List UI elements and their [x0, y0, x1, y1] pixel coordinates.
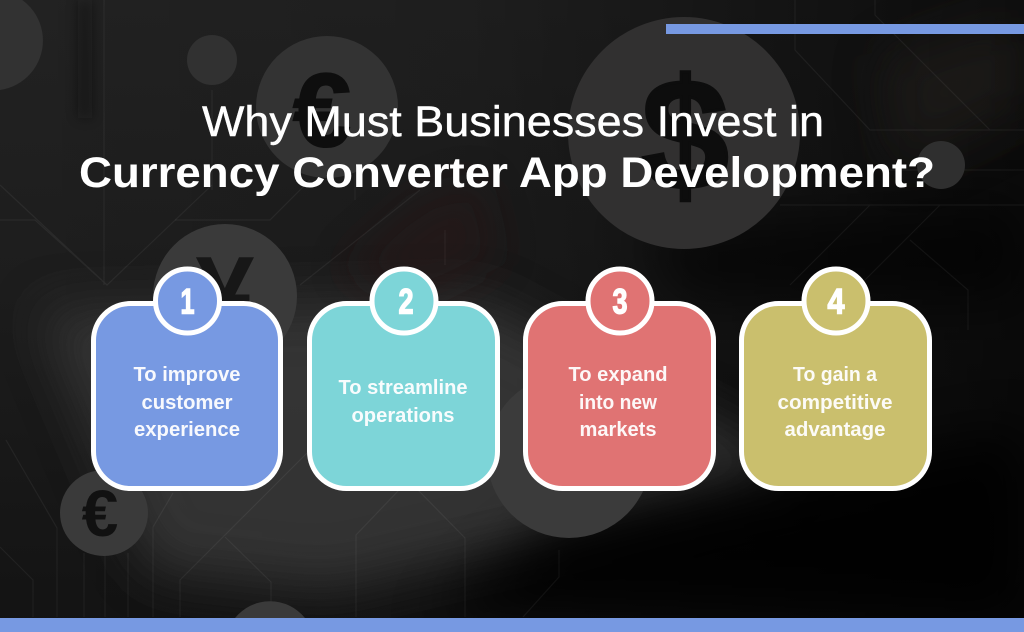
card 2 — [310, 269, 498, 488]
card 2 text — [338, 377, 468, 427]
card 2 text: operations — [352, 405, 454, 427]
currency icon: euro small — [60, 470, 148, 556]
title: Why Must Businesses Invest in — [202, 98, 824, 146]
card 1 — [94, 269, 280, 488]
currency icon: euro large — [256, 36, 398, 178]
badge 2: 2 — [398, 282, 414, 322]
card 4 — [742, 269, 930, 488]
badge 3 — [588, 269, 652, 333]
badge 3: 3 — [612, 282, 628, 322]
currency icon: yen: ¥ — [196, 235, 255, 353]
badge 1 — [156, 269, 220, 333]
currency icon: dollar large — [568, 17, 800, 249]
card 3 text: To expand — [568, 364, 668, 386]
currency icon: bottom dot — [235, 601, 305, 618]
badge 4: 4 — [828, 282, 845, 322]
currency icon: euro small: € — [82, 476, 118, 550]
badge 2 — [372, 269, 436, 333]
currency icon: yen — [153, 224, 297, 368]
card 1 text: customer — [142, 392, 233, 414]
card 3 text: markets — [580, 419, 656, 441]
title — [79, 98, 935, 197]
badge 4 — [804, 269, 868, 333]
card 4 text: competitive — [778, 392, 892, 414]
card 4 text: advantage — [784, 419, 886, 441]
currency icon: small dot — [187, 35, 237, 85]
currency icon: dollar large: $ — [641, 47, 729, 223]
card 3 text — [568, 364, 668, 441]
card 1 text: experience — [134, 419, 240, 441]
card 1 text — [134, 364, 240, 441]
currency icon: bottom circle behind cards — [487, 374, 651, 538]
card 4 text: To gain a — [793, 364, 878, 386]
card 3 — [526, 269, 714, 488]
card 2 text: To streamline — [338, 377, 468, 399]
card 1 text: To improve — [134, 364, 240, 386]
top accent bar — [666, 24, 1024, 34]
card 4 text — [778, 364, 892, 441]
card 3 text: into new — [579, 392, 657, 414]
bottom accent bar — [0, 618, 1024, 632]
title: Currency Converter App Development? — [79, 149, 935, 197]
badge 1: 1 — [180, 282, 194, 322]
currency icon: left partial circle — [0, 0, 43, 90]
currency icon: euro large: € — [293, 53, 351, 169]
currency icon: small dot right — [917, 141, 965, 189]
